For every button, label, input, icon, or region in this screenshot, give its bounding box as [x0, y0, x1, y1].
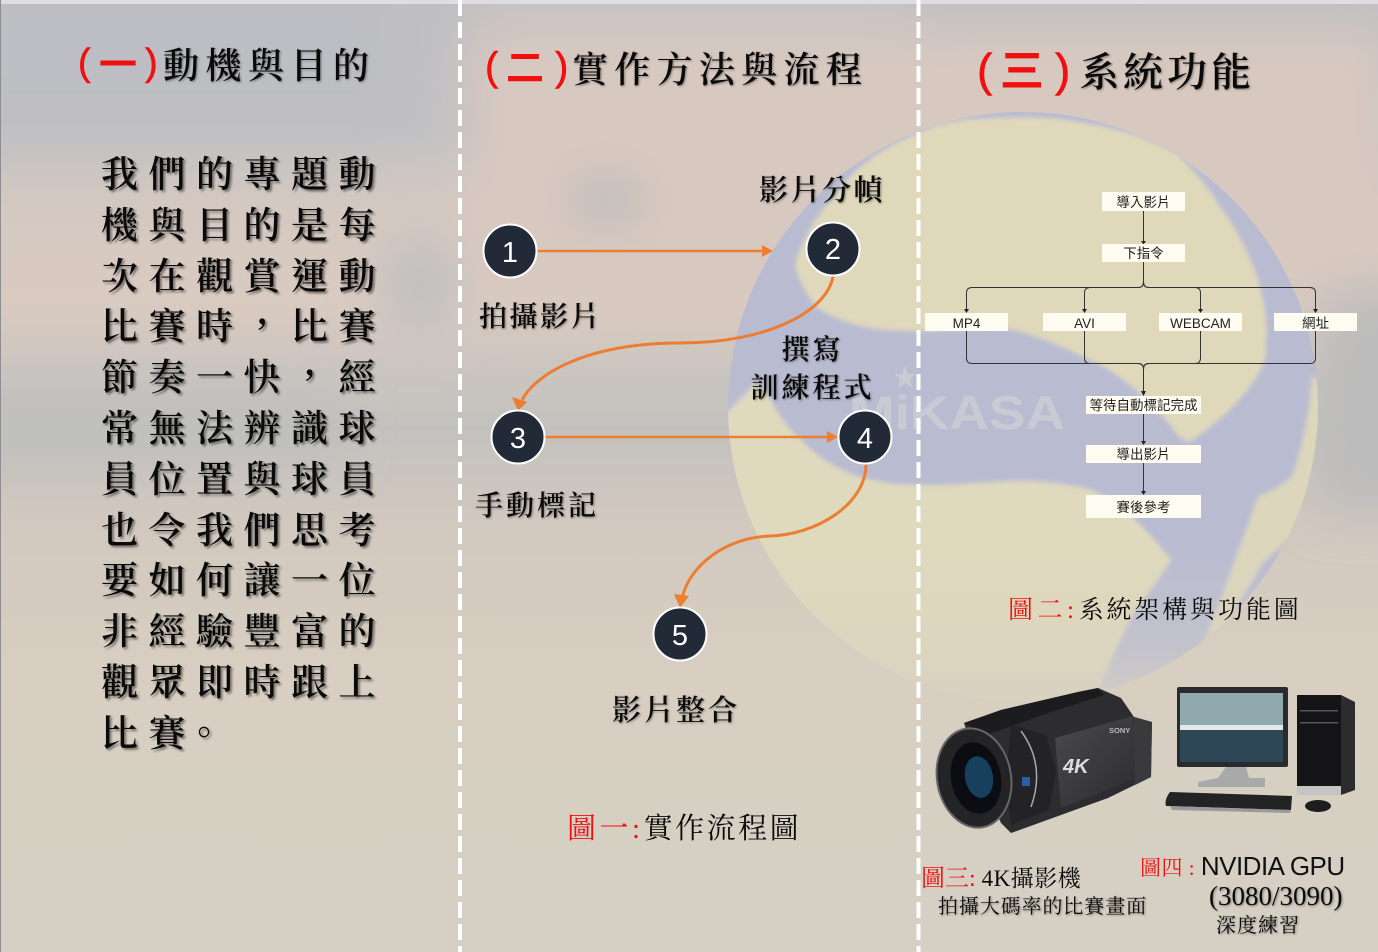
step 3	[492, 410, 544, 464]
icon: 4K camcorder	[936, 688, 1152, 833]
heading: motivation: 動機與目的	[163, 46, 376, 86]
arrow: 2 to 3	[512, 276, 833, 411]
label: step 5: 影片整合	[612, 695, 740, 727]
label: step 1: 拍攝影片	[479, 302, 601, 333]
step 4: 4	[857, 423, 873, 455]
box: WEBCAM	[1159, 313, 1242, 331]
heading: functions: (	[977, 44, 992, 96]
top edge	[0, 0, 1378, 4]
panel: system functions	[921, 44, 1357, 937]
heading: functions: )	[1055, 44, 1070, 96]
heading: method	[485, 45, 868, 90]
flowchart: system architecture	[925, 192, 1357, 518]
heading: method: (	[485, 45, 498, 89]
connectors	[964, 211, 1318, 495]
step 1: 1	[502, 237, 518, 269]
lower left yellow panel	[728, 383, 1172, 697]
caption: figure 4: 圖四 : NVIDIA GPU	[1140, 851, 1345, 881]
arrow: 1 to 2	[536, 245, 773, 257]
label: step 2: 影片分幀	[759, 175, 885, 207]
box: export video	[1086, 445, 1201, 463]
step 2: 2	[825, 234, 841, 266]
box: URL	[1274, 313, 1357, 331]
box: MP4: MP4	[953, 316, 980, 331]
panel: motivation	[78, 42, 386, 755]
text block: motivation paragraph: 我們的專題動 機與目的是每 次在觀賞運動 比賽時，比賽 節奏一快，經 常無法辨識球 員位置與球員 也令我們思考 要如何讓一位 非經驗豐富的 觀眾即時跟上 比賽。	[101, 155, 386, 755]
arrow: 3 to 4	[544, 431, 838, 443]
heading: method: 實作方法與流程	[572, 50, 868, 90]
text: deep learning: 深度練習	[1216, 915, 1300, 937]
label: step 4: 撰寫 訓練程式	[750, 335, 874, 404]
box: command	[1102, 244, 1185, 262]
lower right yellow panel	[1204, 376, 1318, 640]
caption: figure 3: 圖三: 4K攝影機	[921, 866, 1081, 892]
volleyball	[728, 112, 1318, 690]
box: export video: 導出影片	[1116, 447, 1170, 462]
box: AVI	[1043, 313, 1126, 331]
box: wait for auto labelling: 等待自動標記完成	[1090, 398, 1198, 413]
top yellow panel	[795, 117, 1267, 442]
caption: figure 2: 圖二:系統架構與功能圖	[1008, 597, 1302, 624]
step 2	[806, 222, 860, 276]
caption: figure 1: 圖一:實作流程圖	[567, 813, 801, 845]
text: GPU model: (3080/3090)	[1209, 881, 1342, 911]
heading: motivation: )	[145, 42, 158, 84]
brand text on ball: MiKASA	[849, 386, 1065, 439]
icon: 4K camcorder: 4K	[1062, 756, 1090, 778]
icon: desktop computer	[1166, 687, 1355, 813]
box: WEBCAM: WEBCAM	[1170, 316, 1231, 331]
heading: functions: 三	[1000, 47, 1044, 96]
box: MP4	[925, 313, 1008, 331]
step 5: 5	[672, 620, 688, 652]
box: import video: 導入影片	[1116, 195, 1170, 210]
box: post-match reference: 賽後參考	[1116, 500, 1170, 515]
heading: motivation	[78, 42, 376, 87]
brand star	[894, 366, 916, 388]
step 4	[838, 410, 892, 464]
box: post-match reference	[1086, 495, 1201, 518]
panel: method and flow	[475, 45, 892, 845]
heading: method: )	[555, 45, 568, 89]
box: command: 下指令	[1123, 246, 1164, 261]
box: URL: 網址	[1302, 316, 1329, 331]
box: import video	[1102, 192, 1185, 211]
heading: motivation: (	[78, 42, 91, 84]
lower ball fade	[700, 540, 1378, 710]
heading: functions	[977, 44, 1255, 96]
arrow: 4 to 5	[674, 464, 866, 608]
step 1	[484, 224, 536, 278]
heading: functions: 系統功能	[1079, 50, 1255, 95]
text: figure 3 description: 拍攝大碼率的比賽畫面	[938, 896, 1147, 918]
box: AVI: AVI	[1074, 316, 1095, 331]
label: step 3: 手動標記	[475, 491, 599, 522]
heading: method: 二	[506, 48, 544, 90]
step 3: 3	[510, 423, 526, 455]
heading: motivation: 一	[99, 45, 137, 87]
step 5	[654, 608, 706, 660]
icon: 4K camcorder: SONY	[1109, 726, 1130, 735]
flow diagram	[482, 222, 892, 662]
